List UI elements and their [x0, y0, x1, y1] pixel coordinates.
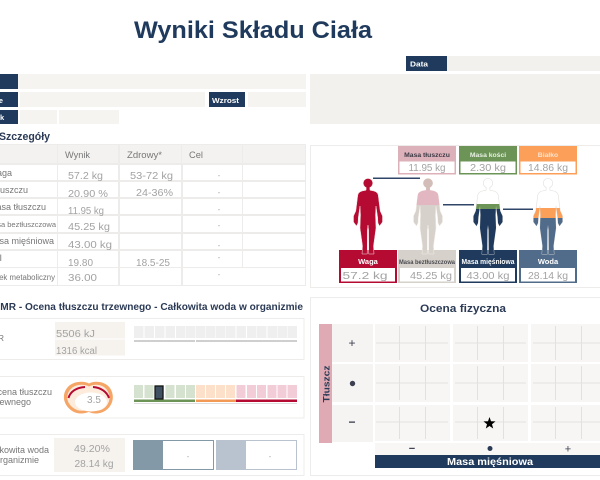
box: fat mass: Masa tłuszczu: [404, 152, 450, 159]
box: muscle mass: 43.00 kg: [466, 271, 510, 282]
results table: 19.80: [68, 258, 93, 269]
results table: 11.95 kg: [68, 206, 104, 217]
results table: 24-36%: [136, 188, 173, 199]
results table: Zdrowy*: [127, 150, 163, 160]
personal info form: Wzrost: [212, 96, 240, 105]
panel: visceral fat: [0, 376, 304, 418]
visceral fat scale: [134, 385, 297, 404]
box: fat mass: [398, 146, 456, 174]
water gauge 2: [216, 440, 296, 470]
box: bone mass: Masa kości: [470, 152, 506, 159]
muscle mass axis: −: [409, 443, 415, 455]
panel: BMR: 1316 kcal: [56, 346, 97, 357]
water gauge 1: [133, 440, 214, 470]
scale marker: [155, 386, 163, 399]
box: muscle mass: Masa mięśniowa: [462, 259, 515, 266]
results table: -: [218, 270, 221, 279]
panel: body composition figures: [310, 146, 600, 288]
connector lines: [373, 178, 533, 210]
water gauge 1: -: [187, 452, 190, 461]
personal info form: [0, 56, 600, 124]
results table: 53-72 kg: [130, 171, 173, 182]
box: lean mass: 45.25 kg: [410, 271, 452, 282]
panel: physical assessment: [310, 298, 600, 476]
box: fat mass: 11.95 kg: [408, 163, 446, 174]
panel: BMR: 5506 kJ: [56, 329, 95, 340]
box: muscle mass: [459, 250, 517, 283]
box: lean mass: Masa beztłuszczowa: [399, 259, 455, 266]
box: water: [519, 250, 577, 283]
results table: 45.25 kg: [68, 222, 110, 233]
water gauge 2: -: [269, 452, 272, 461]
personal info form: k: [0, 113, 5, 122]
results table: -: [218, 241, 221, 250]
box: protein: [519, 146, 577, 174]
results table: 18.5-25: [136, 258, 170, 269]
personal info form: Data: [410, 60, 429, 68]
results table: Cel: [189, 150, 203, 160]
panel: physical assessment: Ocena fizyczna: [420, 303, 507, 315]
results table: [0, 144, 306, 286]
results table: 20.90 %: [68, 189, 108, 200]
box: weight: 57.2 kg: [342, 271, 388, 282]
results table: 43.00 kg: [68, 240, 112, 251]
heading: BMR, visceral fat, total water: BMR - Ocena tłuszczu trzewnego - Całkowita woda w organizmie: [0, 302, 303, 313]
icon: abdomen cross-section: [64, 382, 113, 414]
figure: muscle and bone: [473, 178, 503, 254]
heading: details: Szczegóły: [0, 131, 51, 143]
BMR scale: [134, 326, 297, 342]
panel: total body water: [0, 434, 304, 476]
results table: 57.2 kg: [68, 171, 103, 182]
fat axis: [319, 324, 373, 443]
results table: -: [218, 188, 221, 197]
fat axis: Tłuszcz: [322, 365, 332, 402]
panel: total body water: 49.20%: [74, 444, 110, 455]
results table: Wynik: [65, 150, 91, 160]
results table: 36.00: [68, 273, 98, 284]
muscle mass axis: [375, 443, 600, 468]
results table: -: [218, 171, 221, 180]
figure: lean mass and fat: [413, 178, 443, 254]
muscle mass axis: +: [565, 444, 571, 456]
muscle mass axis: Masa mięśniowa: [447, 457, 533, 468]
icon: abdomen cross-section: 3.5: [87, 395, 101, 406]
box: water: Woda: [538, 257, 559, 266]
box: weight: Waga: [358, 257, 379, 266]
results table: -: [218, 221, 221, 230]
results table: -: [218, 205, 221, 214]
figure: weight: [354, 178, 382, 254]
icon: star marker: [484, 417, 496, 428]
box: water: 28.14 kg: [528, 271, 568, 282]
fat axis: −: [348, 415, 356, 429]
box: protein: 14.86 kg: [528, 163, 568, 174]
title: Wyniki Składu Ciała: [134, 17, 373, 44]
panel: BMR: [0, 318, 304, 360]
panel: total body water: 28.14 kg: [74, 459, 114, 470]
results table: -: [218, 253, 221, 262]
box: lean mass: [398, 250, 456, 283]
fat axis: +: [348, 336, 356, 350]
box: bone mass: [459, 146, 517, 174]
box: protein: Białko: [538, 152, 558, 159]
assessment grid: [375, 324, 600, 441]
box: bone mass: 2.30 kg: [470, 163, 506, 174]
box: weight: [339, 250, 397, 283]
figure: water and protein: [533, 178, 563, 254]
